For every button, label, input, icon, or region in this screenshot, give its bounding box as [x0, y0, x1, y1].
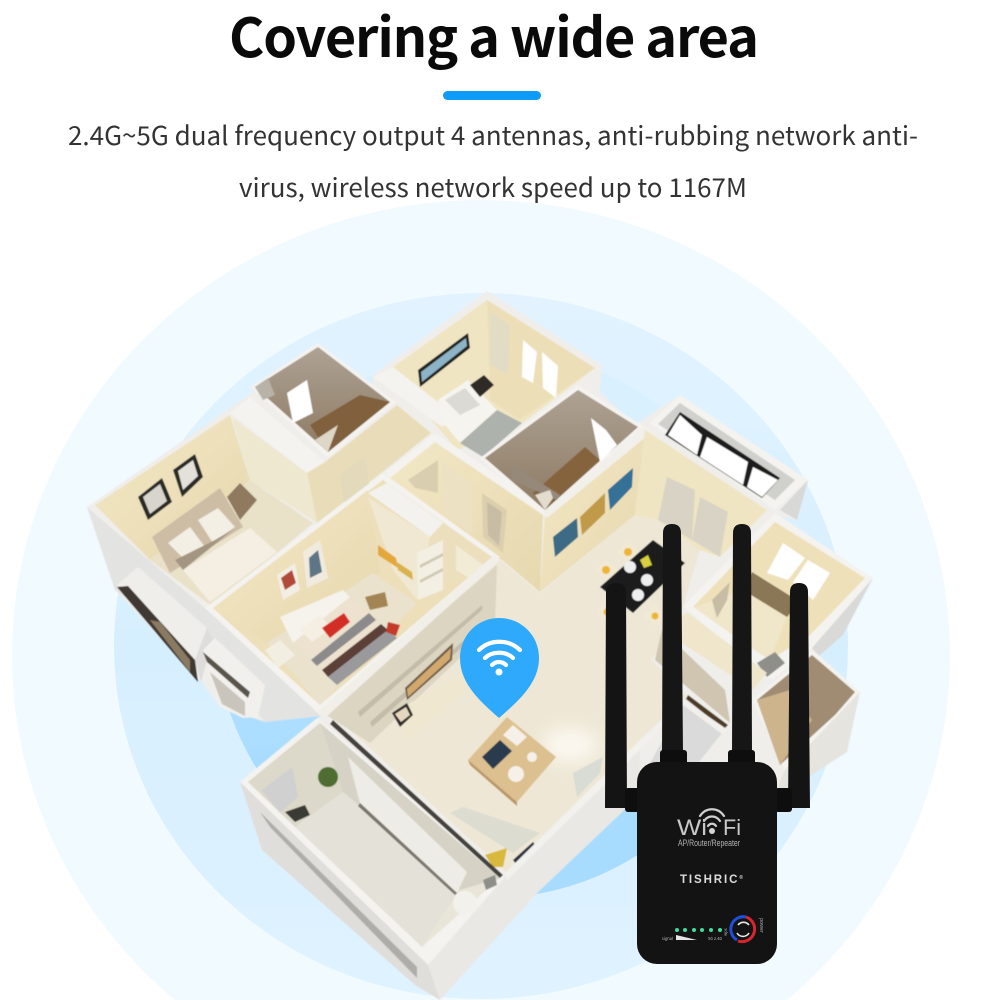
location pin with wifi icon: [460, 618, 539, 718]
brand text: TISHRIC: [680, 874, 737, 886]
room: lower left bedroom: [205, 473, 500, 715]
tv cabinet: [393, 670, 468, 740]
window panes: [522, 340, 558, 398]
small labels: signal: [662, 936, 673, 942]
antenna far left: [605, 583, 627, 808]
television: [405, 643, 453, 700]
picture frame 2: [173, 454, 203, 497]
night table: [227, 483, 257, 520]
room: lower balcony: [240, 718, 642, 1000]
room: corridor with doors: [385, 433, 545, 592]
picture frame 1: [138, 478, 172, 520]
description text: 2.4G~5G dual frequency output 4 antennas, anti-rubbing network anti-: [68, 116, 918, 153]
floor plan illustration: [87, 291, 873, 1000]
chairs: [595, 540, 682, 627]
small labels: [662, 918, 765, 942]
description text: virus, wireless network speed up to 1167M: [239, 168, 747, 205]
wall with dining pictures: [540, 425, 652, 592]
wall pictures: [277, 540, 328, 600]
wall lamp: [453, 891, 477, 915]
small labels: 5G 2.4G: [708, 936, 722, 942]
room: kitchen: [683, 513, 873, 680]
room: living room: [318, 515, 700, 873]
room: upper bedroom: [373, 300, 595, 457]
wifi symbol: [479, 642, 520, 673]
dining room back wall and doors: [635, 430, 767, 557]
balcony with windows: [650, 395, 808, 520]
outer left face: [240, 782, 440, 1000]
room: upper left bedroom: [95, 397, 431, 607]
curtains: [490, 312, 510, 375]
dining table set: [595, 540, 685, 627]
potted plant: [318, 767, 338, 787]
outer right face: [428, 745, 640, 1000]
house outer silhouette: [87, 291, 873, 1000]
wps power ring button: [731, 917, 755, 942]
door track: [330, 720, 503, 878]
bed: [152, 488, 277, 602]
antenna far right: [788, 583, 810, 808]
bed with stripes: [280, 590, 400, 685]
left outer wall shading: [87, 507, 320, 722]
brand text: ®: [739, 874, 743, 881]
wi text: Wi: [677, 815, 707, 840]
model text: AP/Router/Repeater: [678, 838, 740, 848]
status LEDs: [675, 928, 722, 932]
signal wedge: [676, 935, 697, 940]
description text: [68, 116, 918, 205]
wall art: [418, 333, 470, 387]
room: brown bathroom 1: [250, 343, 396, 458]
sofa: [450, 807, 540, 853]
room: brown bathroom 2: [480, 385, 645, 517]
wifi logo dot: [709, 828, 715, 834]
coffee table: [468, 717, 556, 806]
fi text: Fi: [723, 815, 741, 840]
antenna inner left: [662, 524, 683, 752]
router body: [637, 762, 777, 964]
small labels: power: [758, 918, 765, 933]
small picture frame: [392, 703, 413, 727]
router device: [605, 524, 810, 964]
kitchen cabinets: [637, 612, 767, 787]
room: lower right: [752, 650, 860, 802]
wifi logo: [700, 809, 724, 826]
protruding window block 2: [203, 638, 265, 718]
bed: [438, 375, 522, 457]
small labels: wps: [723, 928, 729, 936]
background circles: [12, 200, 950, 1000]
wardrobe: [368, 483, 492, 600]
accent bar: [443, 91, 541, 100]
protruding window block 1: [117, 567, 213, 682]
antenna joints: [625, 750, 792, 812]
antenna inner right: [732, 524, 752, 752]
